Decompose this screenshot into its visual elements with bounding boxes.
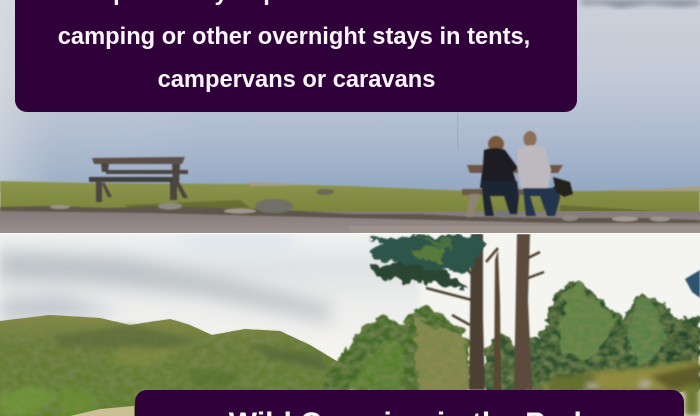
bottom photo: hills and pine forest xyxy=(0,234,700,416)
right-hand forest xyxy=(322,280,700,392)
foreground pine trunks xyxy=(426,234,544,390)
empty picnic bench xyxy=(89,157,188,202)
ground and heather on right xyxy=(530,360,700,416)
far-right pine branch xyxy=(685,270,700,298)
top callout panel xyxy=(15,0,577,112)
second line of top text: camping or other overnight stays in tents, xyxy=(58,24,530,50)
woman in dark top xyxy=(480,136,519,216)
man in white shirt xyxy=(517,131,560,216)
gravel path xyxy=(0,211,700,233)
hills xyxy=(0,315,345,416)
forest patches on hillside xyxy=(0,325,330,416)
sandy clearing xyxy=(70,406,134,416)
couple at picnic bench xyxy=(462,131,573,217)
third line of top text: campervans or caravans xyxy=(158,67,435,93)
top photo: loch shore with picnic benches xyxy=(0,0,700,233)
bottom heading panel xyxy=(135,390,684,416)
pine canopy xyxy=(368,236,488,288)
clouds xyxy=(0,234,330,322)
shore rocks xyxy=(0,189,700,223)
shore grass xyxy=(0,180,700,211)
